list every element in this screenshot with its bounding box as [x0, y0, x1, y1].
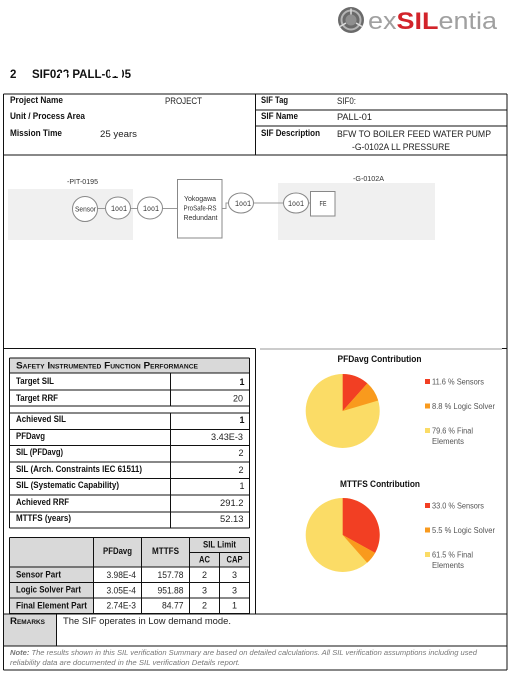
SIF fields: -G-0102A LL PRESSURE — [352, 142, 450, 152]
label: sensor tag: -PIT-0195 — [67, 179, 98, 186]
row: logic solver part: 3 — [202, 586, 207, 596]
row: final element part: Final Element Part — [16, 600, 87, 610]
icon: logo emblem — [338, 7, 364, 33]
table rows: MTTFS (years) — [16, 513, 71, 523]
table rows: 52.13 — [220, 514, 244, 524]
row: sensor part: 157.78 — [158, 570, 184, 580]
row: logic solver part: Logic Solver Part — [16, 584, 81, 594]
row: final element part: 1 — [232, 600, 237, 610]
final element group background — [278, 183, 435, 240]
table heading: Safety Instrumented Function Performance — [16, 360, 198, 370]
row: final element part: 2.74E-3 — [106, 600, 136, 610]
table rows: 20 — [233, 394, 243, 404]
sensor group background — [8, 189, 133, 240]
final element voting node: 1oo1 — [288, 200, 304, 209]
note — [10, 648, 478, 667]
connector lines — [97, 203, 311, 208]
SIF fields — [261, 95, 491, 152]
panel: remarks — [4, 614, 507, 646]
sensor node: Sensor — [75, 206, 97, 214]
chart title: PFDavg Contribution — [338, 354, 422, 364]
panel: architecture diagram — [8, 176, 435, 240]
table headers: SIL Limit — [203, 540, 236, 550]
section title: 2 — [10, 69, 16, 81]
logo wordmark: exSILentia — [368, 8, 498, 35]
logic solver box: Yokogawa — [184, 196, 216, 203]
pie chart — [306, 374, 380, 448]
remarks heading: Remarks — [10, 616, 45, 626]
legend — [425, 502, 495, 570]
row: sensor part: Sensor Part — [16, 570, 61, 580]
panel: PFDavg contribution — [306, 354, 495, 448]
legend: 5.5 % Logic Solver — [432, 526, 495, 535]
project fields: Mission Time — [10, 128, 62, 138]
final element box: FE — [320, 201, 327, 208]
row: sensor part: 3 — [232, 570, 237, 580]
SIF fields: SIF Description — [261, 128, 320, 138]
label: final element tag: -G-0102A — [353, 176, 384, 183]
table rows: PFDavg — [16, 431, 45, 441]
table rows: Target SIL — [16, 376, 54, 386]
input voting node — [138, 197, 162, 219]
chart title: MTTFS Contribution — [340, 479, 420, 489]
output voting node — [228, 193, 254, 213]
input voting node: 1oo1 — [143, 205, 159, 214]
pie chart — [306, 498, 380, 572]
sensor voting node: 1oo1 — [111, 205, 127, 214]
project fields: 25 years — [100, 129, 138, 139]
final element box — [310, 192, 335, 216]
table rows: 1 — [240, 481, 245, 491]
row: logic solver part: 951.88 — [158, 586, 184, 596]
panel: part breakdown table — [10, 538, 250, 614]
table rows: Achieved SIL — [16, 414, 66, 424]
table rows: 1 — [240, 415, 245, 425]
logic solver box: Redundant — [184, 215, 218, 222]
table rows: 3.43E-3 — [211, 432, 243, 442]
table rows: 1 — [240, 377, 245, 387]
legend: 11.6 % Sensors — [432, 378, 484, 386]
row: final element part — [16, 600, 237, 610]
SIF fields: SIF Tag — [261, 95, 288, 105]
SIF fields: PALL-01 — [337, 112, 372, 122]
table headers: PFDavg — [103, 546, 132, 556]
project fields: Unit / Process Area — [10, 111, 86, 121]
legend: 61.5 % Final — [432, 550, 473, 560]
table rows: SIL (PFDavg) — [16, 447, 63, 457]
row: sensor part: 3.98E-4 — [106, 570, 136, 580]
legend — [425, 378, 495, 446]
table rows: SIL (Systematic Capability) — [16, 480, 119, 490]
row: final element part: 2 — [202, 600, 207, 610]
legend: Elements — [432, 561, 464, 570]
project fields — [10, 95, 202, 139]
row: final element part: 84.77 — [162, 600, 184, 610]
table headers: MTTFS — [152, 546, 179, 556]
row: logic solver part: 3.05E-4 — [106, 586, 136, 596]
output voting node: 1oo1 — [235, 200, 251, 209]
logic solver box: ProSafe-RS — [184, 206, 217, 212]
table headers: AC — [199, 554, 210, 564]
table headers — [103, 540, 242, 564]
sensor node — [72, 196, 98, 222]
logic solver box — [178, 180, 222, 238]
sensor voting node — [106, 197, 130, 219]
section title — [10, 67, 132, 81]
legend: 8.8 % Logic Solver — [432, 402, 495, 411]
legend: 33.0 % Sensors — [432, 502, 484, 510]
table rows: 291.2 — [220, 498, 244, 508]
project fields: PROJECT — [165, 96, 202, 106]
SIF fields: SIF Name — [261, 111, 298, 121]
table rows: 2 — [238, 448, 244, 458]
row: logic solver part — [16, 584, 237, 596]
SIF fields: SIF0: — [337, 96, 356, 106]
table rows: Achieved RRF — [16, 497, 69, 507]
row: logic solver part: 3 — [232, 586, 237, 596]
frame bottom line — [4, 669, 507, 671]
panel: safety instrumented function performance table — [10, 358, 250, 528]
table headers: CAP — [226, 554, 242, 564]
panel: MTTFS contribution — [306, 479, 495, 572]
row: sensor part — [16, 570, 237, 580]
note: Note: The results shown in this SIL verification Summary are based on detailed calculations. All SIL verification assumptions including used — [10, 648, 478, 657]
logo: exSILentia — [338, 7, 498, 35]
table rows: Target RRF — [16, 393, 58, 403]
table rows: SIL (Arch. Constraints IEC 61511) — [16, 464, 142, 474]
legend: Elements — [432, 437, 464, 446]
divider frame for results — [4, 348, 507, 614]
SIF fields: BFW TO BOILER FEED WATER PUMP — [337, 129, 491, 139]
row: sensor part: 2 — [202, 570, 207, 580]
final element voting node — [284, 193, 308, 213]
project fields: Project Name — [10, 95, 63, 105]
table rows — [16, 376, 245, 524]
table rows: 2 — [238, 465, 244, 475]
section title: SIF023 PALL-0105 — [32, 69, 132, 81]
legend: 79.6 % Final — [432, 426, 473, 436]
remarks text: The SIF operates in Low demand mode. — [63, 616, 231, 627]
note: reliability data are documented in the SIL verification Details report. — [10, 658, 240, 667]
